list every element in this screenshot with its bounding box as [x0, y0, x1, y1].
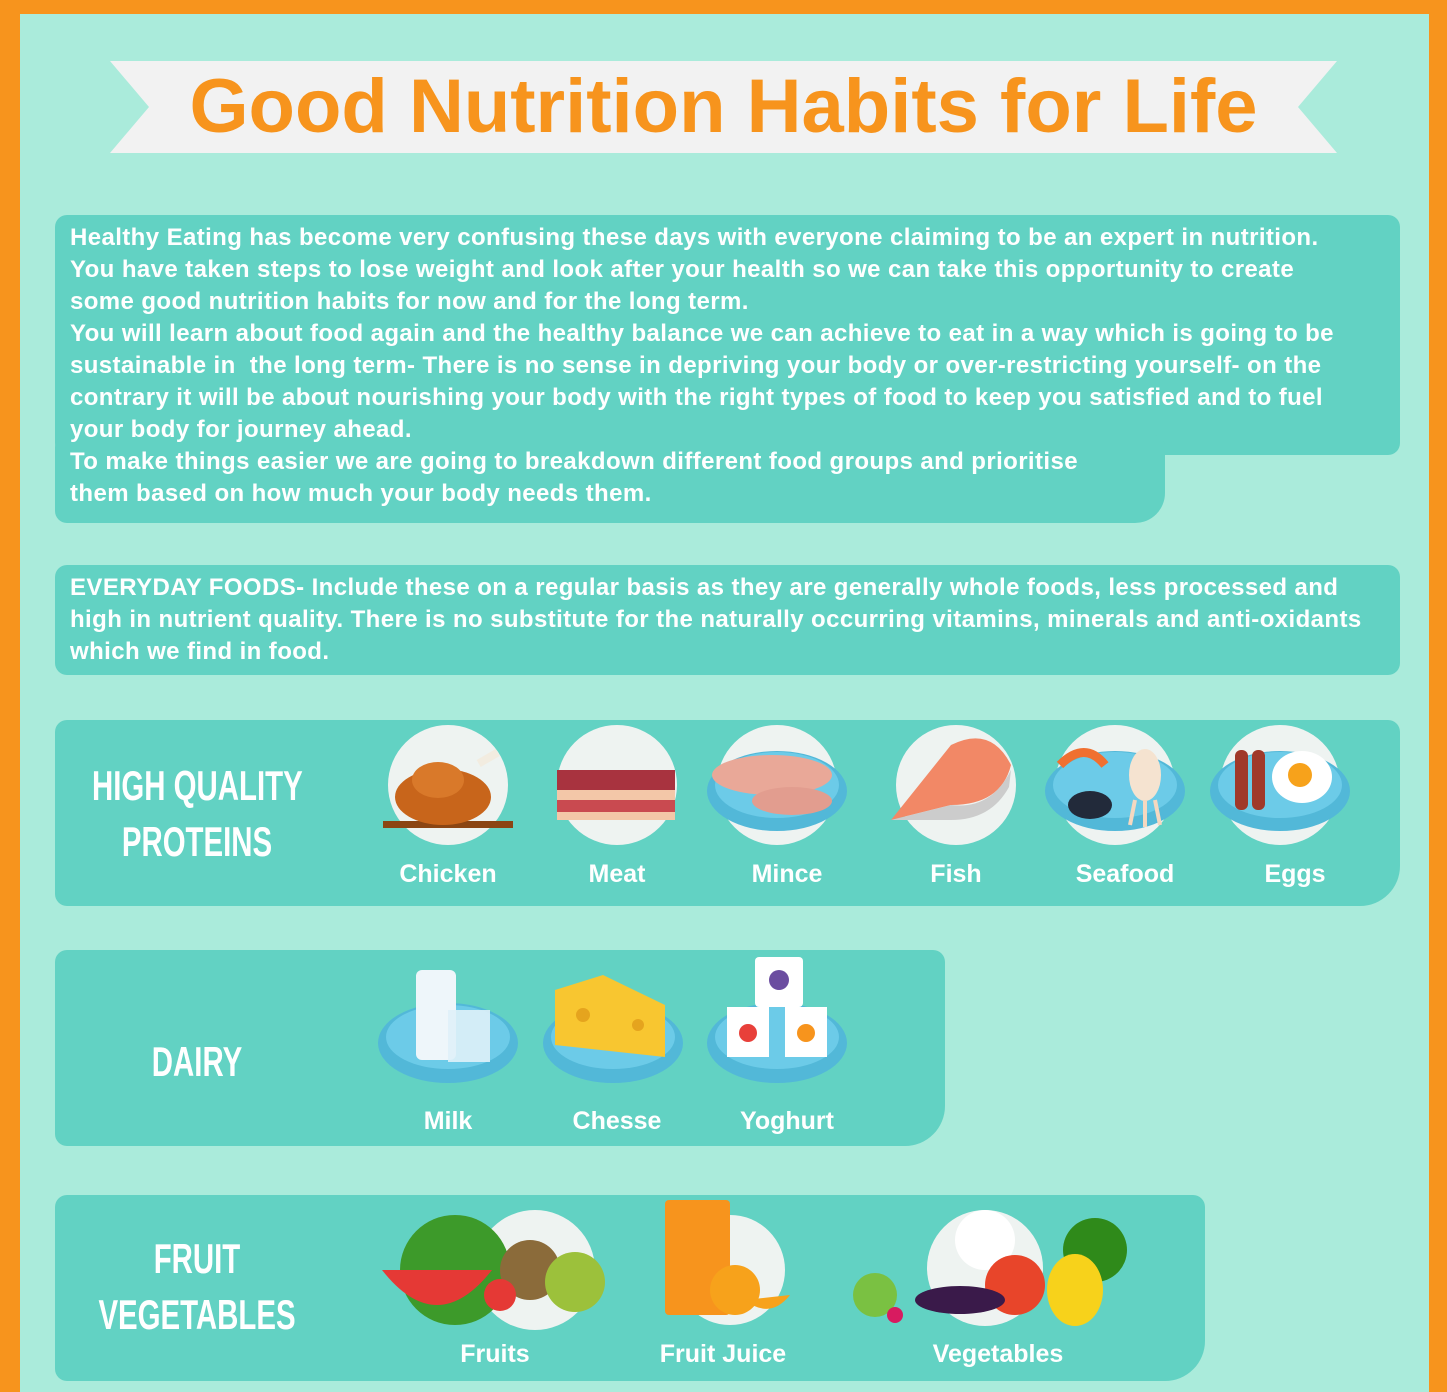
label: Fruit Juice: [660, 1340, 786, 1368]
icon: milk: [378, 970, 518, 1083]
title: Good Nutrition Habits for Life: [189, 64, 1258, 149]
icon: eggs: [1210, 725, 1350, 845]
icon: fish: [891, 725, 1016, 845]
label: Yoghurt: [740, 1107, 834, 1135]
label: Seafood: [1076, 860, 1174, 888]
icon: fruits: [382, 1210, 605, 1330]
panel: dairy: [55, 950, 945, 1146]
panel: intro: [55, 215, 1400, 523]
icon: chicken: [383, 725, 513, 845]
icon: yoghurt: [707, 957, 847, 1083]
heading: dairy: DAIRY: [152, 1038, 242, 1085]
icon: meat: [557, 725, 677, 845]
label: Vegetables: [933, 1340, 1063, 1368]
heading: proteins: PROTEINS: [122, 818, 272, 865]
icon: cheese: [543, 975, 683, 1083]
panel: fruit vegetables: [55, 1195, 1205, 1381]
intro text: contrary it will be about nourishing your body with the right types of food to keep you satisfied and to fuel: [70, 384, 1323, 411]
intro text: You have taken steps to lose weight and look after your health so we can take this opportunity to create: [70, 256, 1294, 283]
heading: fruit vegetables: VEGETABLES: [98, 1291, 296, 1338]
heading: proteins: [92, 762, 303, 865]
icon: mince: [707, 725, 847, 845]
heading: proteins: HIGH QUALITY: [92, 762, 303, 809]
intro text: sustainable in the long term- There is no sense in depriving your body or over-restricting yourself- on the: [70, 352, 1321, 379]
intro text: Healthy Eating has become very confusing these days with everyone claiming to be an expert in nutrition.: [70, 224, 1319, 251]
heading: fruit vegetables: FRUIT: [154, 1235, 240, 1282]
heading: fruit vegetables: [98, 1235, 296, 1338]
intro text: [70, 224, 1334, 507]
title banner: [110, 61, 1337, 153]
icon: fruit juice: [665, 1200, 790, 1325]
intro text: them based on how much your body needs them.: [70, 480, 652, 507]
panel: proteins: [55, 720, 1400, 906]
intro text: your body for journey ahead.: [70, 416, 412, 443]
label: Fish: [930, 860, 982, 888]
intro text: You will learn about food again and the healthy balance we can achieve to eat in a way which is going to be: [70, 320, 1334, 347]
label: Chesse: [573, 1107, 661, 1135]
icon: seafood: [1045, 725, 1185, 845]
everyday text: [70, 574, 1362, 665]
label: Chicken: [399, 860, 497, 888]
label: Eggs: [1264, 860, 1326, 888]
label: Milk: [424, 1107, 472, 1135]
intro text: some good nutrition habits for now and for the long term.: [70, 288, 749, 315]
everyday text: EVERYDAY FOODS- Include these on a regular basis as they are generally whole foods, less processed and: [70, 574, 1338, 601]
label: Meat: [589, 860, 645, 888]
icon: vegetables: [853, 1210, 1127, 1326]
label: Fruits: [460, 1340, 530, 1368]
intro text: To make things easier we are going to breakdown different food groups and prioritise: [70, 448, 1078, 475]
everyday text: which we find in food.: [70, 638, 329, 665]
panel: everyday foods: [55, 565, 1400, 675]
label: Mince: [752, 860, 822, 888]
everyday text: high in nutrient quality. There is no substitute for the naturally occurring vitamins, minerals and anti-oxidants: [70, 606, 1362, 633]
